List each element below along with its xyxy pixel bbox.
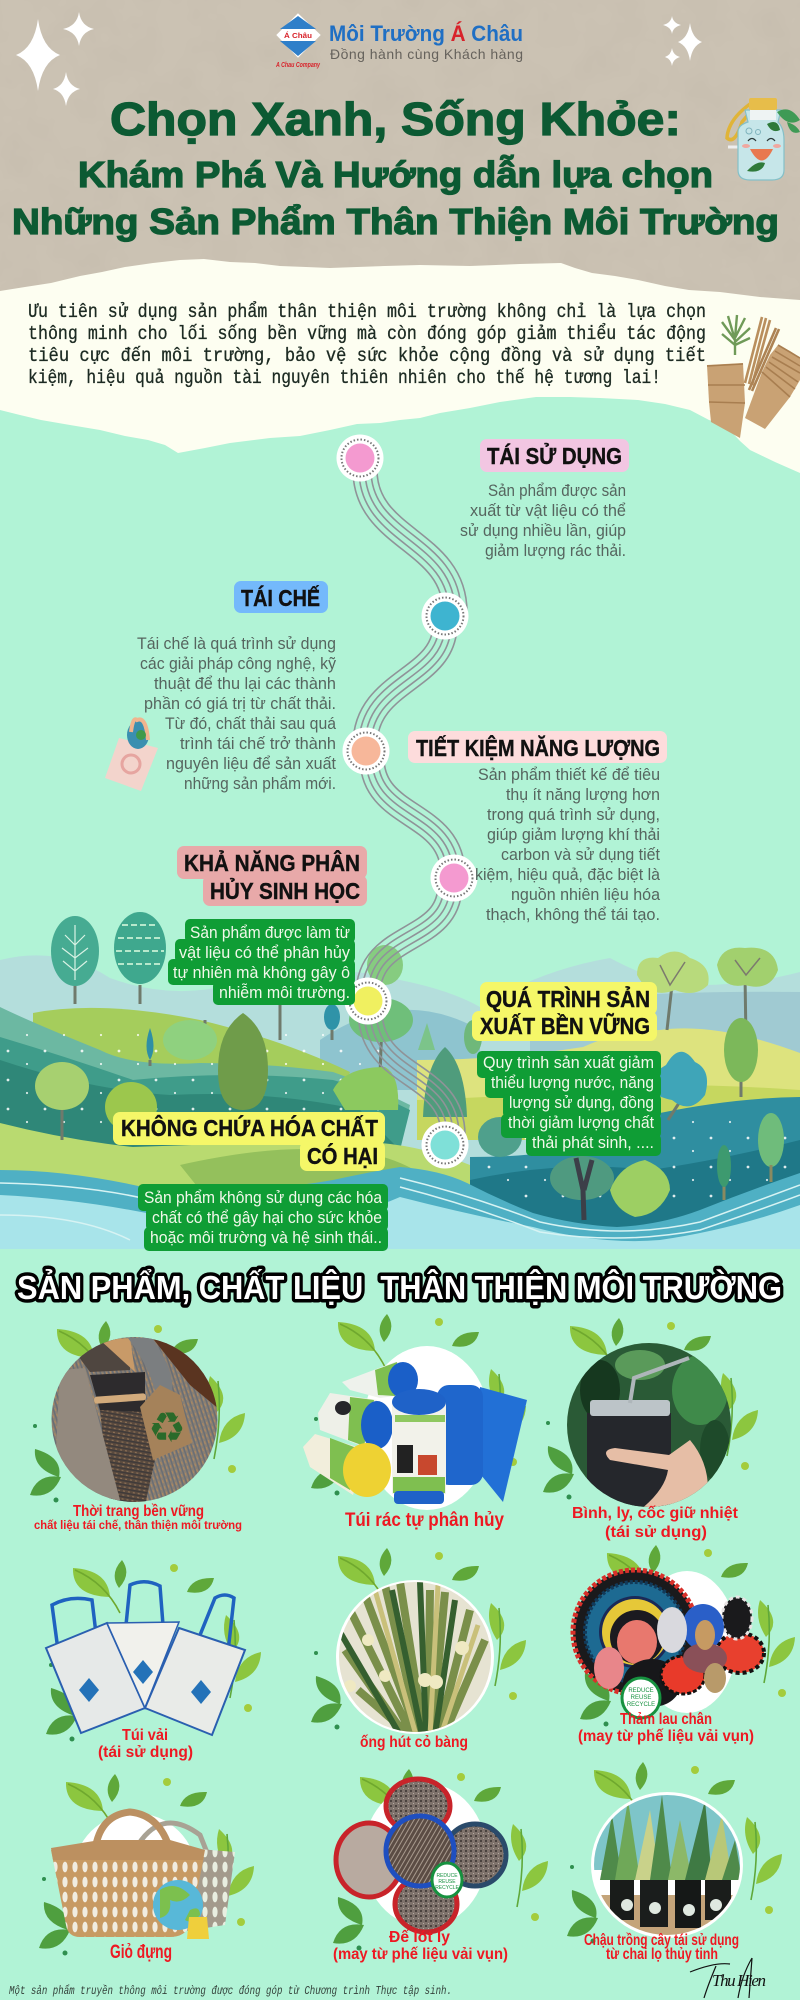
signature: Thu Hien — [712, 1971, 766, 1990]
description: trong quá trình sử dụng, — [487, 806, 660, 824]
light teal hill — [0, 1007, 410, 1150]
recycle badge: REUSE — [631, 1695, 651, 1701]
description: nguồn nhiên liệu hóa — [511, 886, 661, 904]
description: Sản phẩm thiết kế để tiêu — [478, 766, 660, 784]
photo: snake plants — [594, 1795, 740, 1935]
footer note: Một sản phẩm truyền thông môi trường được đóng góp từ Chương trình Thực tập sinh. — [9, 1983, 452, 1998]
description: Tái chế là quá trình sử dụng — [137, 635, 336, 653]
product: grass straws — [311, 1548, 526, 1751]
caption — [578, 1711, 754, 1745]
crown T4 — [717, 948, 778, 987]
intro paragraph — [28, 301, 706, 389]
intro paragraph: thông minh cho lối sống bền vững mà còn đóng góp giảm thiểu tác động — [28, 323, 706, 345]
title: Những Sản Phẩm Thân Thiện Môi Trường — [12, 201, 779, 242]
foreground trees — [550, 1113, 784, 1220]
caption: Thời trang bền vững — [73, 1503, 204, 1520]
photo: tumbler and hand — [567, 1343, 731, 1507]
photo: baskets — [51, 1812, 235, 1937]
panel: Quá trình sản xuất bền vững — [472, 982, 661, 1156]
tagline: Đồng hành cùng Khách hàng — [330, 46, 523, 62]
heading: KHẢ NĂNG PHÂN — [184, 848, 360, 876]
panel: Tiết kiệm năng lượng — [408, 731, 667, 924]
lime hill lower — [0, 1123, 470, 1186]
description — [138, 1184, 388, 1251]
photo: three tote bags — [46, 1582, 245, 1735]
torn cream paper — [0, 259, 800, 473]
icon: earth mascot — [153, 1880, 209, 1939]
description — [168, 919, 355, 1005]
heading: TÁI CHẾ — [241, 584, 320, 611]
caption — [34, 1503, 242, 1532]
logo mark: Á Châu — [284, 31, 312, 40]
signature — [690, 1958, 766, 1998]
heading: QUÁ TRÌNH SẢN — [486, 984, 650, 1012]
description: thụ ít năng lượng hơn — [506, 786, 660, 804]
description: giảm lượng rác thải. — [485, 542, 626, 560]
caption: Giỏ đựng — [110, 1942, 172, 1963]
logo mark — [277, 14, 320, 57]
product: fabric bags — [46, 1560, 261, 1761]
description: những sản phẩm mới. — [184, 775, 336, 793]
panel: Tái sử dụng — [460, 439, 629, 560]
recycle badge: RECYCLE — [435, 1885, 459, 1891]
description: trình tái chế trở thành — [180, 735, 336, 753]
description: thạch, không thể tái tạo. — [486, 906, 660, 924]
recycle badge: RECYCLE — [627, 1702, 655, 1708]
photo: recycled cardigan — [50, 1335, 220, 1505]
logo — [275, 14, 523, 69]
recycle badge: REDUCE — [436, 1873, 458, 1879]
yellow hill right — [417, 1028, 800, 1100]
recycle badge: REDUCE — [628, 1688, 654, 1694]
photo: rolled bags — [303, 1362, 527, 1504]
caption — [572, 1505, 738, 1541]
heading: XUẤT BỀN VỮNG — [480, 1012, 650, 1039]
teal hill right — [470, 1097, 800, 1180]
misty background hills — [0, 955, 800, 1180]
milestone 3 — [342, 728, 390, 774]
recycle badge — [622, 1678, 660, 1718]
caption: chất liệu tái chế, thân thiện môi trường — [34, 1518, 242, 1532]
description: carbon và sử dụng tiết — [501, 846, 660, 864]
heading: TÁI SỬ DỤNG — [487, 441, 622, 469]
caption: ống hút cỏ bàng — [360, 1734, 468, 1751]
company small: A Chau Company — [275, 62, 321, 69]
recycle tag — [140, 1385, 192, 1460]
heading — [113, 1112, 385, 1171]
milestone 6 — [422, 1122, 468, 1168]
caption: Túi rác tự phân hủy — [345, 1510, 504, 1531]
description: chất có thể gây hại cho sức khỏe — [152, 1209, 382, 1227]
milestone 4 — [430, 854, 478, 902]
recycle badge: REUSE — [438, 1879, 456, 1885]
caption: từ chai lọ thủy tinh — [606, 1946, 718, 1963]
landscape illustration — [0, 912, 800, 1249]
distant blue slopes — [320, 1010, 480, 1090]
caption: Thảm lau chân — [620, 1711, 712, 1728]
heading — [177, 846, 367, 906]
milestone 2 — [422, 592, 468, 640]
intro paragraph: Ưu tiên sử dụng sản phẩm thân thiện môi trường không chỉ là lựa chọn — [28, 301, 706, 323]
description: nhiễm môi trường. — [219, 983, 350, 1002]
description: Từ đó, chất thải sau quá — [165, 715, 337, 733]
description: phần có giá trị từ chất thải. — [144, 695, 336, 713]
recycle tag: ♻ — [148, 1403, 186, 1452]
product: basket — [39, 1774, 254, 1963]
title: Chọn Xanh, Sống Khỏe: — [110, 93, 681, 145]
dark teal hill — [0, 1060, 400, 1150]
panel: Khả năng phân hủy sinh học — [168, 846, 367, 1005]
description: Sản phẩm không sử dụng các hóa — [144, 1189, 383, 1207]
caption: Chậu trồng cây tái sử dụng — [584, 1932, 739, 1949]
description: thiểu lượng nước, năng — [491, 1074, 654, 1092]
product: coasters — [333, 1769, 548, 1963]
trees — [35, 912, 778, 1157]
intro paragraph: kiệm, hiệu quả nguồn tài nguyên thiên nhiên cho thế hệ tương lai! — [28, 367, 661, 389]
description — [477, 1051, 661, 1156]
caption — [584, 1932, 739, 1963]
heading: HỦY SINH HỌC — [210, 876, 360, 904]
title: Khám Phá Và Hướng dẫn lựa chọn — [78, 154, 713, 195]
icon: paper cups and straws — [707, 315, 800, 438]
description: sử dụng nhiều lần, giúp — [460, 522, 626, 540]
crown T3 — [637, 952, 709, 993]
description: Quy trình sản xuất giảm — [483, 1054, 654, 1072]
caption: (tái sử dụng) — [605, 1524, 707, 1541]
description: thải phát sinh, .... — [532, 1134, 654, 1152]
caption — [333, 1929, 508, 1963]
header panel: kraft paper — [0, 0, 800, 302]
heading: KHÔNG CHỨA HÓA CHẤT — [121, 1114, 378, 1141]
description — [460, 482, 626, 560]
heading: TIẾT KIỆM NĂNG LƯỢNG — [416, 734, 660, 761]
recycle badge — [432, 1863, 462, 1897]
winding road — [352, 473, 468, 1134]
description: thời giảm lượng chất — [508, 1114, 654, 1132]
product: insulated tumbler — [543, 1318, 758, 1541]
lime hill left — [33, 1008, 350, 1076]
caption: Đế lót ly — [389, 1929, 450, 1946]
product: biodegradable trash bags — [303, 1314, 527, 1531]
milestone 5 — [344, 978, 392, 1024]
description — [475, 766, 661, 924]
product: bottle planters — [567, 1762, 782, 1963]
caption: (tái sử dụng) — [98, 1744, 193, 1761]
icon: water bottle — [727, 98, 800, 180]
product: doormats — [573, 1545, 795, 1745]
description: hoặc môi trường và hệ sinh thái.. — [150, 1229, 382, 1247]
description — [137, 635, 337, 793]
milestone 1 — [336, 434, 384, 482]
panel: Tái chế — [105, 581, 337, 793]
medium teal hill — [0, 1037, 410, 1150]
caption: (may từ phế liệu vải vụn) — [578, 1728, 754, 1745]
title — [12, 93, 779, 242]
description: vật liệu có thể phân hủy — [179, 944, 351, 962]
caption: (may từ phế liệu vải vụn) — [333, 1946, 508, 1963]
intro paragraph: tiêu cực đến môi trường, bảo vệ sức khỏe cộng đồng và sử dụng tiết — [28, 345, 706, 367]
photo: coasters — [336, 1779, 506, 1932]
photo: rag rugs — [573, 1570, 764, 1707]
photo: straws — [335, 1580, 495, 1735]
heading: CÓ HẠI — [307, 1142, 378, 1169]
description: Sản phẩm được sản — [488, 482, 626, 500]
description: Sản phẩm được làm từ — [190, 924, 350, 942]
sparkles left — [16, 12, 94, 106]
caption — [98, 1727, 193, 1761]
description: thuật để thu lại các thành — [154, 675, 336, 693]
description: lượng sử dụng, đồng — [509, 1094, 654, 1112]
sparkles right — [663, 16, 702, 66]
description: xuất từ vật liệu có thể — [470, 502, 626, 520]
caption: Bình, ly, cốc giữ nhiệt — [572, 1505, 738, 1522]
description: giúp giảm lượng khí thải — [487, 826, 660, 844]
heading — [472, 982, 657, 1041]
description: các giải pháp công nghệ, kỹ — [140, 655, 337, 673]
description: kiệm, hiệu quả, đặc biệt là — [475, 866, 661, 884]
product: sustainable fashion — [30, 1321, 245, 1532]
company name: Môi Trường Á Châu — [329, 21, 523, 46]
snow dots left — [6, 1034, 380, 1124]
description: tự nhiên mà không gây ô — [173, 964, 350, 982]
caption: Túi vải — [122, 1727, 168, 1744]
panel: Không chứa hóa chất có hại — [113, 1112, 388, 1251]
description: nguyên liệu để sản xuất — [166, 755, 336, 773]
river — [0, 1167, 800, 1249]
icon: recycled bag — [105, 719, 158, 791]
